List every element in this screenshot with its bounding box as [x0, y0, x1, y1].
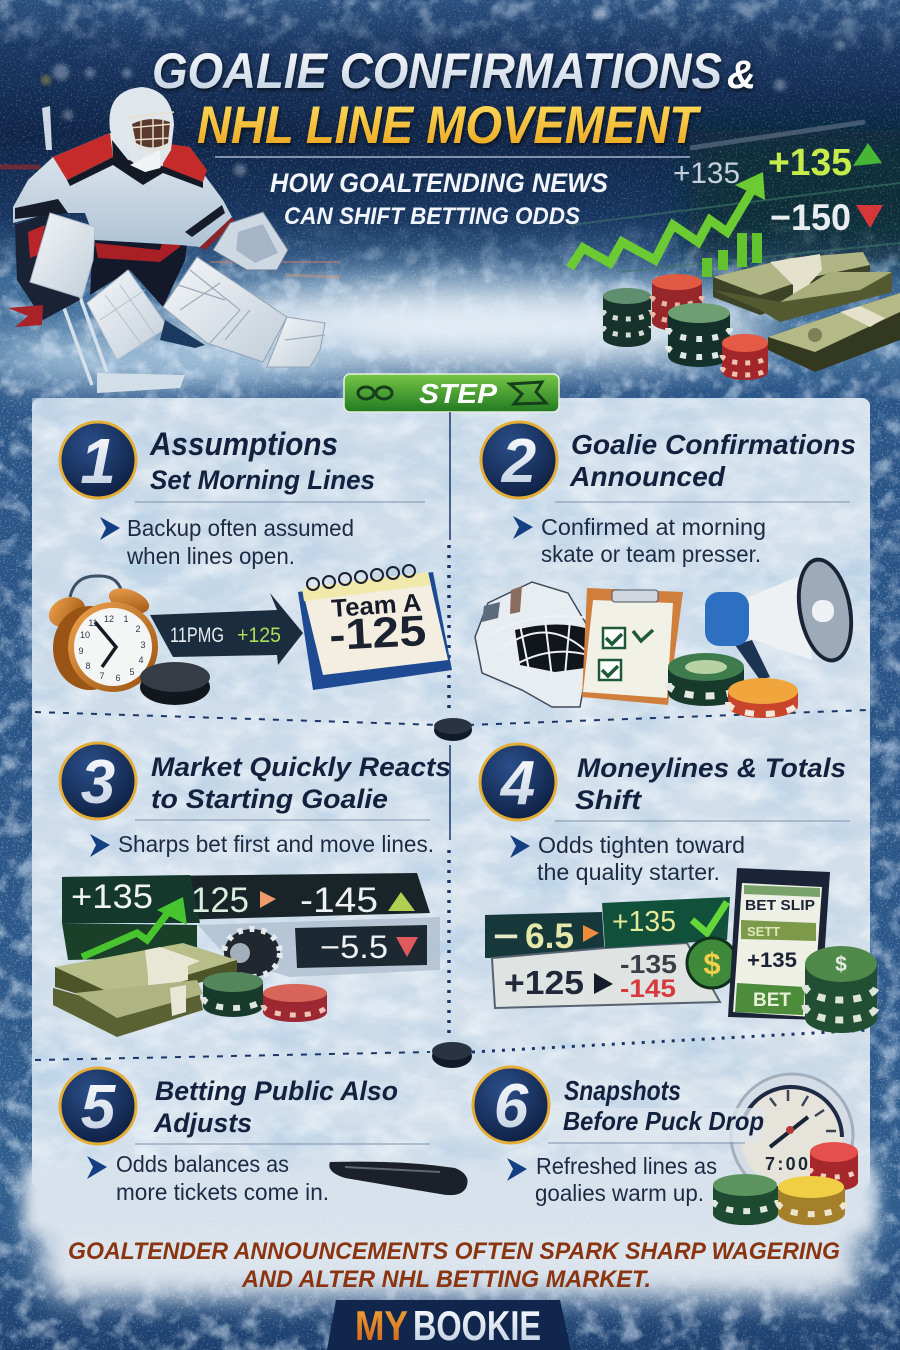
- heading 4: [555, 753, 850, 821]
- text: step 4 detail: the quality starter.: [537, 859, 720, 885]
- heading 3: [135, 752, 451, 820]
- heading 2: [555, 429, 856, 502]
- icon: puck divider 2: [432, 1042, 472, 1068]
- step 4: [480, 744, 877, 1033]
- heading 3: to Starting Goalie: [151, 784, 388, 814]
- text: step 6 detail: [507, 1153, 717, 1206]
- step 3: [53, 743, 451, 1037]
- illustration: odds board with cash and chips: -145: [300, 881, 378, 920]
- illustration: odds board with cash and chips: [53, 873, 440, 1037]
- number badge 1: [60, 422, 136, 498]
- text: step 2 detail: skate or team presser.: [541, 541, 761, 567]
- illustration: alarm clock to Team A odds: 3: [140, 640, 146, 650]
- illustration: alarm clock to Team A odds: 10: [80, 630, 90, 640]
- text: step 6 detail: Refreshed lines as: [536, 1153, 717, 1179]
- subtitle: [270, 168, 608, 230]
- illustration: alarm clock to Team A odds: 8: [85, 661, 91, 671]
- odds ticker and rising line: +135: [673, 157, 740, 190]
- number badge 1: 1: [80, 425, 116, 497]
- title: GOALIE CONFIRMATIONS: [152, 43, 722, 99]
- illustration: odds tickets and bet slip phone: $: [703, 946, 721, 981]
- logo: MyBookie: BOOKIE: [413, 1302, 541, 1349]
- pants: [90, 240, 187, 307]
- text: step 5 detail: [87, 1151, 329, 1205]
- text: step 4 detail: [510, 832, 745, 885]
- illustration: hockey goalie: [8, 87, 325, 393]
- left pad: [87, 270, 168, 360]
- subtitle: HOW GOALTENDING NEWS: [270, 168, 608, 198]
- illustration: alarm clock to Team A odds: 9: [78, 646, 84, 656]
- step 5: [60, 1068, 468, 1205]
- illustration: alarm clock to Team A odds: 11PMG: [170, 624, 224, 647]
- title: &: [727, 53, 756, 97]
- heading 2: Goalie Confirmations: [571, 429, 856, 460]
- illustration: odds board with cash and chips: 125: [191, 881, 249, 920]
- heading 1: [135, 426, 425, 502]
- text: step 1 detail: when lines open.: [126, 543, 295, 569]
- illustration: alarm clock to Team A odds: Team A: [330, 589, 422, 623]
- illustration: odds tickets and bet slip phone: 6.5: [525, 917, 574, 956]
- heading 4: Shift: [575, 785, 642, 815]
- heading 3: Market Quickly Reacts: [151, 752, 451, 782]
- helmet: [109, 87, 174, 172]
- illustration: mask, clipboard, megaphone, chips: [475, 553, 861, 718]
- text: step 5 detail: more tickets come in.: [116, 1179, 329, 1205]
- illustration: odds tickets and bet slip phone: +135: [612, 906, 676, 938]
- number badge 2: 2: [501, 427, 536, 496]
- icon: puck divider 1: [434, 718, 472, 741]
- closing statement: AND ALTER NHL BETTING MARKET.: [241, 1266, 651, 1293]
- heading 4: Moneylines & Totals: [577, 753, 846, 783]
- heading 6: Snapshots: [564, 1075, 681, 1106]
- illustration: alarm clock to Team A odds: 6: [115, 673, 121, 683]
- heading 6: [548, 1075, 765, 1143]
- blocker: [30, 213, 95, 298]
- title: NHL LINE MOVEMENT: [197, 96, 702, 155]
- illustration: odds board with cash and chips: +135: [71, 878, 153, 916]
- illustration: stopwatch and chips: [713, 1074, 858, 1225]
- illustration: odds tickets and bet slip phone: BET SLIP: [745, 897, 815, 914]
- text: step 2 detail: Confirmed at morning: [541, 514, 766, 540]
- text: step 5 detail: Odds balances as: [116, 1151, 289, 1177]
- odds ticker and rising line: [570, 142, 883, 277]
- illustration: alarm clock to Team A odds: +125: [237, 624, 281, 647]
- number badge 6: [473, 1067, 549, 1143]
- step 1: [44, 422, 452, 705]
- number badge 4: [480, 744, 556, 820]
- illustration: alarm clock to Team A odds: 11: [88, 618, 98, 628]
- closing statement: GOALTENDER ANNOUNCEMENTS OFTEN SPARK SHARP WAGERING: [68, 1238, 840, 1265]
- text: step 1 detail: Backup often assumed: [127, 515, 354, 541]
- subtitle: CAN SHIFT BETTING ODDS: [284, 203, 580, 230]
- illustration: alarm clock to Team A odds: 2: [135, 624, 141, 634]
- heading 5: Betting Public Also: [155, 1076, 398, 1106]
- odds ticker and rising line: −150: [770, 197, 851, 238]
- text: step 4 detail: Odds tighten toward: [538, 832, 745, 858]
- illustration: odds tickets and bet slip phone: SETT: [747, 924, 780, 939]
- illustration: odds board with cash and chips: −5.5: [320, 929, 388, 965]
- step badge: STEP: [419, 378, 497, 409]
- number badge 5: [60, 1068, 136, 1144]
- heading 1: Assumptions: [149, 426, 338, 462]
- illustration: odds tickets and bet slip phone: +125: [504, 964, 584, 1001]
- title: [152, 43, 756, 157]
- left leg: [15, 213, 80, 320]
- illustration: alarm clock to Team A odds: 1: [123, 614, 129, 624]
- text: step 1 detail: [100, 515, 354, 569]
- illustration: stopwatch and chips: 7:00: [765, 1154, 808, 1174]
- illustration: odds tickets and bet slip phone: $: [835, 953, 847, 976]
- illustration: alarm clock to Team A odds: -125: [328, 607, 427, 660]
- jersey: [13, 133, 232, 247]
- heading 5: [135, 1076, 430, 1144]
- step badge: [344, 374, 559, 412]
- illustration: alarm clock to Team A odds: 4: [138, 655, 144, 665]
- illustration: odds tickets and bet slip phone: -145: [620, 975, 676, 1003]
- illustration: alarm clock to Team A odds: 12: [104, 614, 114, 624]
- number badge 5: 5: [81, 1073, 117, 1142]
- heading 5: Adjusts: [153, 1108, 252, 1138]
- right pad: [163, 257, 287, 362]
- heading 1: Set Morning Lines: [150, 465, 375, 495]
- illustration: alarm clock to Team A odds: 7: [99, 671, 105, 681]
- logo: MyBookie: [327, 1300, 571, 1350]
- number badge 2: [481, 422, 557, 498]
- closing statement: [68, 1238, 840, 1293]
- number badge 6: 6: [494, 1072, 529, 1141]
- illustration: odds tickets and bet slip phone: BET: [753, 990, 791, 1011]
- glove: [213, 212, 288, 270]
- text: step 3 detail: Sharps bet first and move lines.: [118, 831, 434, 857]
- illustration: alarm clock to Team A odds: 5: [129, 667, 135, 677]
- heading 2: Announced: [569, 461, 726, 492]
- illustration: alarm clock to Team A odds: [44, 565, 452, 705]
- step 2: [475, 422, 861, 718]
- ice band behind closing statement: [40, 1150, 860, 1298]
- number badge 4: 4: [499, 749, 535, 818]
- illustration: odds tickets and bet slip phone: [485, 868, 877, 1033]
- heading 6: Before Puck Drop: [563, 1106, 764, 1136]
- number badge 3: 3: [81, 748, 115, 817]
- logo: MyBookie: MY: [355, 1302, 408, 1349]
- text: step 2 detail: [513, 514, 766, 567]
- illustration: cash stacks and casino chips: [603, 252, 900, 380]
- step 6: [473, 1067, 858, 1225]
- odds ticker and rising line: +135: [768, 142, 852, 184]
- panel: ice steps board: [0, 398, 900, 1350]
- illustration: odds tickets and bet slip phone: -135: [620, 949, 677, 979]
- icon: hockey stick blade: [329, 1162, 468, 1195]
- number badge 3: [60, 743, 136, 819]
- illustration: odds tickets and bet slip phone: −: [493, 917, 519, 956]
- text: step 6 detail: goalies warm up.: [535, 1180, 704, 1206]
- dotted route dividers: [35, 412, 868, 1060]
- illustration: odds tickets and bet slip phone: +135: [747, 949, 797, 972]
